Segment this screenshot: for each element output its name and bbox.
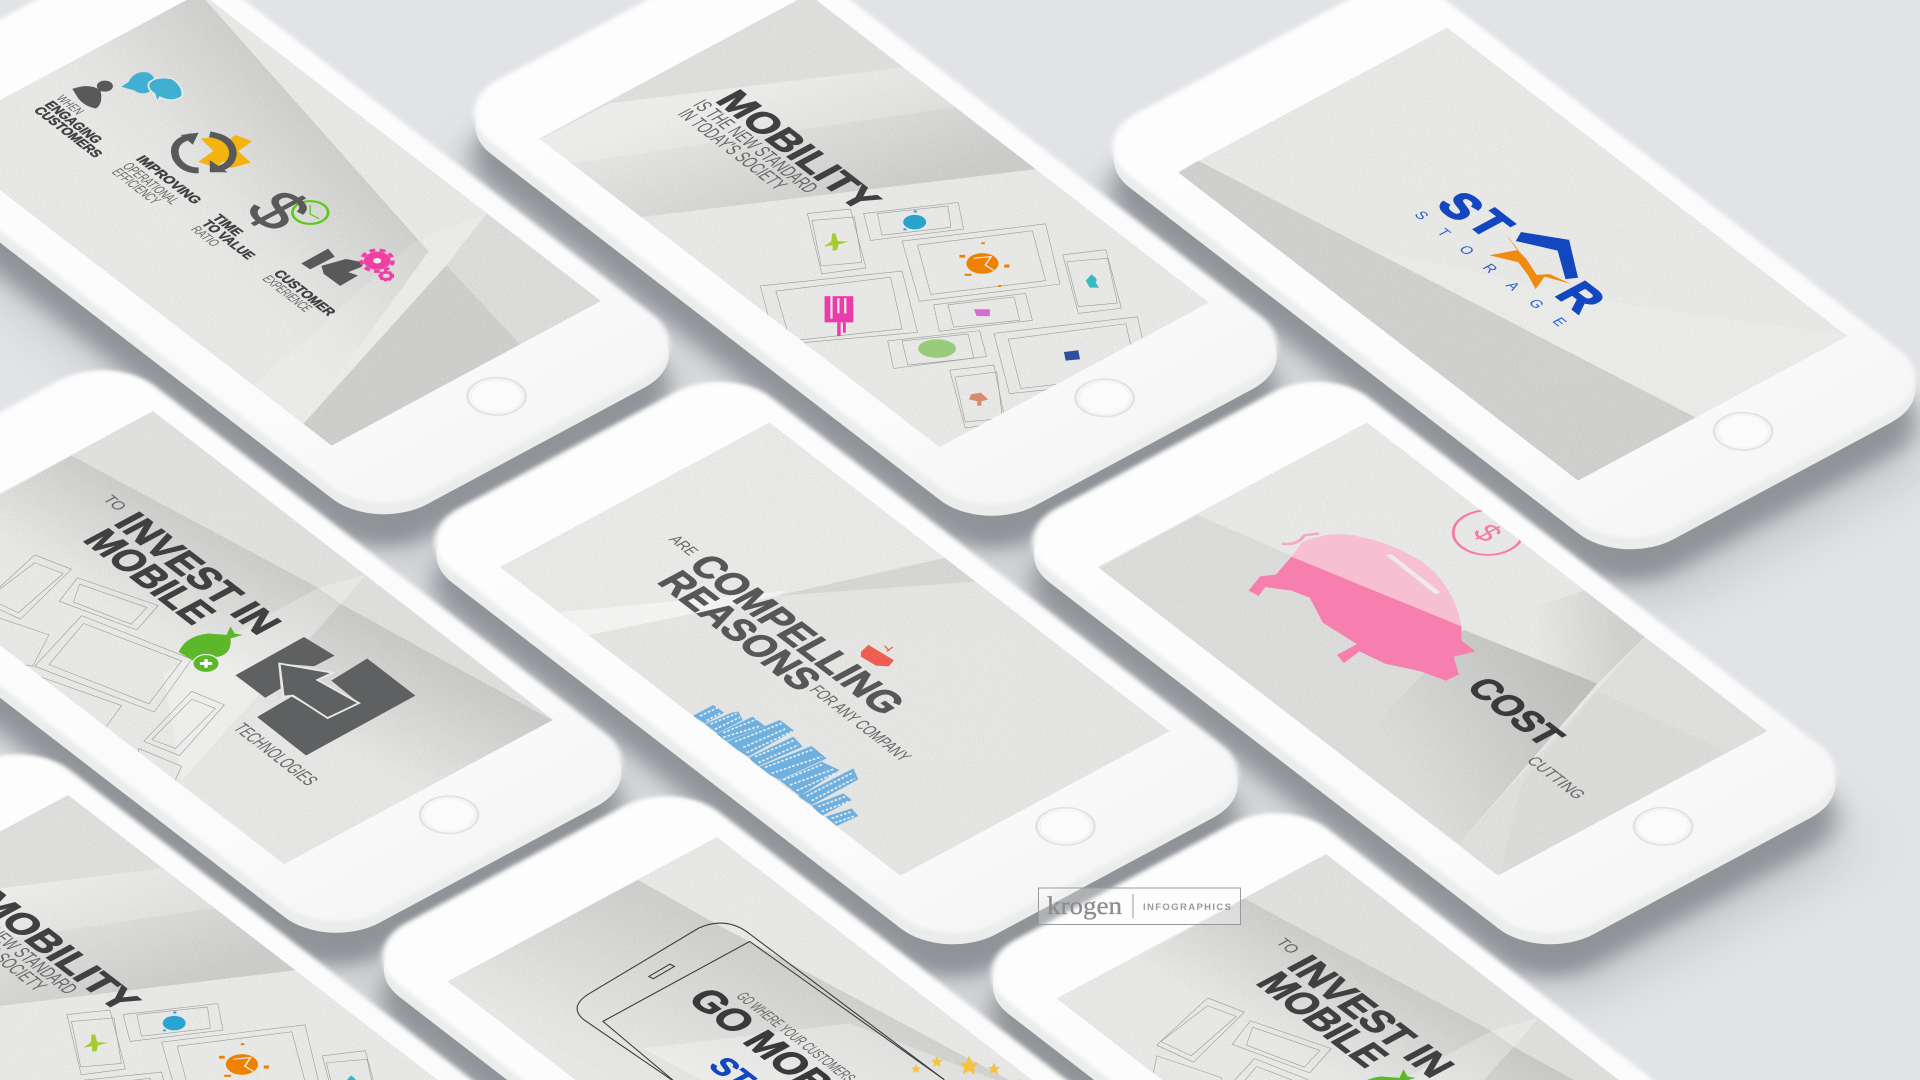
watermark: krogen infographics	[1038, 888, 1240, 924]
icon: speech bubbles	[121, 72, 182, 103]
device outlines	[760, 203, 1152, 428]
compelling heading: ARE	[664, 533, 701, 558]
cost heading and coin: $	[1465, 519, 1510, 547]
phone: customer benefits	[0, 0, 705, 532]
invest heading repeat: TO	[1271, 936, 1303, 956]
screen: mobility repeat	[0, 780, 490, 1080]
star logo: wordmark: T	[1457, 203, 1524, 244]
icon: pig tail	[1282, 534, 1319, 544]
icon: money bag	[179, 626, 243, 672]
screen: compelling reasons	[490, 410, 1180, 880]
star logo: wordmark: R	[1545, 275, 1617, 319]
icon: coin slot	[1386, 554, 1441, 594]
cost heading and coin: CUTTING	[1522, 754, 1590, 802]
icon: plane	[824, 234, 849, 251]
star logo: star	[1490, 234, 1571, 289]
star logo: wordmark: STORAGE	[1410, 209, 1570, 329]
device outlines	[0, 555, 224, 784]
benefit labels: ENGAGING	[41, 99, 106, 146]
benefit labels: RATIO	[187, 224, 223, 249]
watermark: krogen infographics: INFOGRAPHICS	[1143, 902, 1231, 913]
screen: star storage	[1170, 20, 1860, 490]
mobility heading: IS THE NEW STANDARD	[687, 97, 823, 196]
benefit labels: $	[229, 180, 329, 241]
rating stars	[911, 1056, 1000, 1075]
star logo: roof	[1516, 232, 1578, 279]
mobility artwork	[540, 0, 1152, 428]
icon: fingerprint	[918, 339, 956, 358]
icon: facebook	[1064, 350, 1080, 361]
screen: invest	[0, 400, 570, 870]
icon: globe	[959, 242, 1009, 287]
mobility heading: MOBILITY	[706, 85, 889, 216]
invest heading: TO	[98, 493, 130, 513]
benefit labels: WHEN	[53, 93, 87, 117]
compelling heading	[620, 527, 958, 770]
cost heading and coin	[1310, 501, 1755, 802]
icon: city skyline	[693, 705, 858, 826]
benefit labels: CUSTOMERS	[30, 105, 106, 160]
phone: mobility repeat	[0, 737, 573, 1080]
icon: clock	[292, 201, 328, 224]
phone: go mobile	[346, 779, 1222, 1080]
phone: invest in mobile	[0, 353, 658, 950]
phone: invest repeat	[955, 796, 1831, 1080]
mobility heading: IN TODAY'S SOCIETY	[672, 106, 792, 193]
icon: cart	[974, 309, 990, 316]
invest heading: MOBILE	[74, 523, 225, 630]
phone: mobility	[472, 0, 1280, 516]
icon: person	[72, 81, 113, 108]
invest heading: TECHNOLOGIES	[228, 721, 322, 789]
invest heading repeat: MOBILE	[1247, 966, 1398, 1073]
phone line drawing	[577, 923, 944, 1080]
icon: piggy bank dark half	[1249, 557, 1476, 681]
icon: piggy bank light half	[1292, 534, 1461, 626]
icon: teal blob	[1086, 274, 1099, 288]
invest heading	[0, 489, 426, 789]
icon: pink organ	[825, 296, 853, 336]
screen: cost cutting	[1090, 410, 1780, 880]
benefit labels: OPERATIONAL	[118, 161, 183, 207]
benefit labels: EFFICIENCY	[107, 166, 164, 207]
cost heading and coin: COST	[1458, 672, 1573, 752]
light band	[643, 1023, 1021, 1080]
benefit labels: IMPROVING	[133, 153, 205, 206]
star logo: wordmark: S	[1426, 185, 1496, 228]
icon: arrow outline	[279, 663, 359, 718]
icon: coffee cup	[861, 645, 894, 666]
icon: upload folder	[235, 637, 415, 756]
invest heading: INVEST IN	[105, 506, 291, 640]
benefit labels: CUSTOMER	[270, 268, 339, 318]
screen: customer benefits	[0, 0, 601, 446]
benefit labels: EXPERIENCE	[259, 273, 316, 314]
compelling heading: FOR ANY COMPANY	[805, 682, 916, 764]
star logo: wordmark	[1410, 182, 1621, 329]
invest artwork	[0, 410, 555, 864]
screen: mobility	[530, 0, 1220, 460]
compelling heading: REASONS	[648, 565, 831, 697]
invest heading repeat	[1224, 932, 1464, 1080]
screen: go mobile	[440, 830, 1120, 1080]
benefit labels: TIME	[209, 212, 247, 238]
compelling heading: COMPELLING	[679, 548, 915, 721]
icon: gears and hand	[301, 249, 393, 286]
phone: compelling reasons	[398, 364, 1274, 962]
icon: blue blob	[903, 210, 926, 230]
benefit labels: TO VALUE	[198, 218, 259, 261]
phone: cost cutting	[996, 364, 1872, 962]
icon: lamp	[969, 393, 988, 406]
screen: invest repeat	[1050, 845, 1730, 1080]
watermark: krogen infographics: krogen	[1047, 893, 1123, 920]
phone: star storage	[1076, 0, 1920, 567]
benefit labels	[35, 94, 336, 316]
icon: cycle arrows and yellow cross	[175, 133, 252, 172]
